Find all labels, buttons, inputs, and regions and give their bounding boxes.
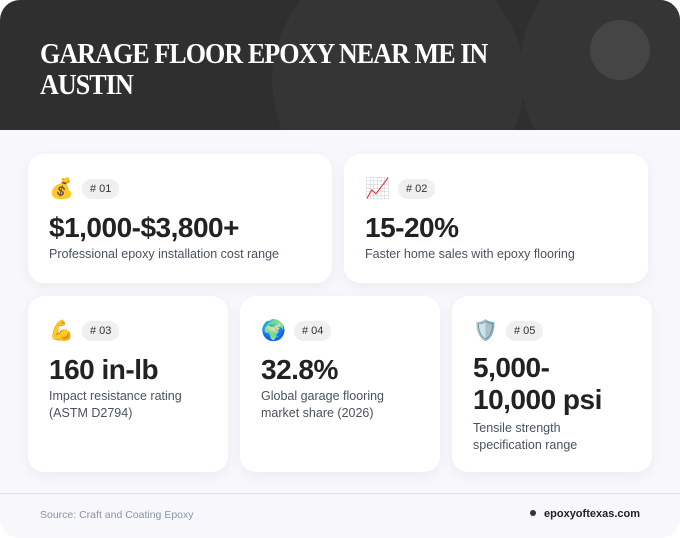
footer xyxy=(0,493,680,538)
card 02: 15-20% xyxy=(365,212,459,243)
card 05: Tensile strength xyxy=(473,421,561,435)
card 03: # 03 xyxy=(90,325,111,337)
card 03 xyxy=(28,296,228,472)
card 02: # 02 xyxy=(406,183,427,195)
card 05: 10,000 psi xyxy=(473,384,602,415)
card 01 xyxy=(28,154,332,283)
card 04: 32.8% xyxy=(261,354,338,385)
card 05: 5,000- xyxy=(473,352,549,383)
card 01: # 01 xyxy=(90,183,111,195)
footer: epoxyoftexas.com xyxy=(544,508,640,520)
card 04: Global garage flooring xyxy=(261,389,384,403)
title xyxy=(40,39,488,101)
icon: globe: 🌍 xyxy=(261,318,286,342)
card 03: Impact resistance rating xyxy=(49,389,182,403)
card 02 xyxy=(344,154,648,283)
icon: chart: 📈 xyxy=(365,176,390,200)
icon: money bag: 💰 xyxy=(49,176,74,200)
title: AUSTIN xyxy=(40,70,133,101)
icon: muscle: 💪 xyxy=(49,318,74,342)
card 04: # 04 xyxy=(302,325,323,337)
title: GARAGE FLOOR EPOXY NEAR ME IN xyxy=(40,39,487,70)
card 02: Faster home sales with epoxy flooring xyxy=(365,247,575,261)
card 03: (ASTM D2794) xyxy=(49,406,132,420)
card 04 xyxy=(240,296,440,472)
card 05: specification range xyxy=(473,438,577,452)
footer: Source: Craft and Coating Epoxy xyxy=(40,509,194,521)
card 03: 160 in-lb xyxy=(49,354,158,385)
card 01: $1,000-$3,800+ xyxy=(49,212,239,243)
card 05 xyxy=(452,296,652,472)
icon: shield: 🛡️ xyxy=(473,318,498,342)
card 05: # 05 xyxy=(514,325,535,337)
card 04: market share (2026) xyxy=(261,406,374,420)
card 01: Professional epoxy installation cost range xyxy=(49,247,279,261)
header xyxy=(0,0,680,130)
